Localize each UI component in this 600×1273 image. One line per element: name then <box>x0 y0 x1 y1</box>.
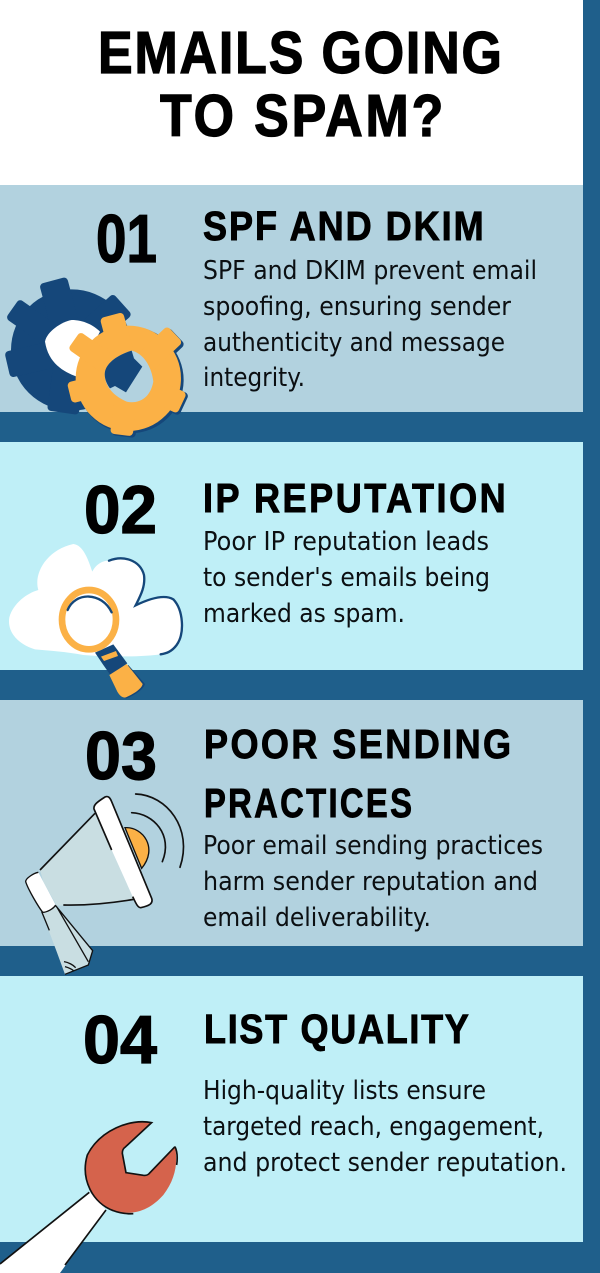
body text: list quality: and protect sender reputation. <box>203 1148 567 1178</box>
heading: list quality: LIST QUALITY <box>204 1007 469 1053</box>
body text: IP reputation: Poor IP reputation leads <box>203 527 489 557</box>
heading: SPF and DKIM: SPF AND DKIM <box>203 204 484 250</box>
body text: list quality: High-quality lists ensure <box>203 1076 486 1106</box>
body text: poor sending practices: Poor email sending practices <box>203 831 543 861</box>
panel: poor sending practices <box>0 700 583 974</box>
body text: SPF and DKIM <box>203 256 537 393</box>
icon: wrench <box>0 1122 177 1273</box>
panel: SPF and DKIM <box>0 185 583 438</box>
body text: SPF and DKIM: SPF and DKIM prevent email <box>203 256 537 286</box>
panel: IP reputation <box>0 442 583 698</box>
icon: gears <box>4 277 189 438</box>
body text: poor sending practices: email deliverability. <box>203 903 431 933</box>
heading: poor sending practices <box>204 722 511 826</box>
icon: cloud with magnifier <box>9 544 182 698</box>
body text: IP reputation: to sender's emails being <box>203 563 490 593</box>
heading: poor sending practices: PRACTICES <box>204 779 412 826</box>
body text: poor sending practices: harm sender reputation and <box>203 867 538 897</box>
number 03: 03 <box>85 718 157 794</box>
title: TO SPAM? <box>160 83 443 149</box>
number 01: 01 <box>96 201 157 277</box>
icon: megaphone <box>26 794 184 974</box>
body text: SPF and DKIM: integrity. <box>203 363 305 393</box>
heading: IP reputation: IP REPUTATION <box>203 476 506 522</box>
body text: SPF and DKIM: spoofing, ensuring sender <box>203 292 511 322</box>
title: EMAILS GOING <box>98 20 502 86</box>
body text: SPF and DKIM: authenticity and message <box>203 328 505 358</box>
number 02: 02 <box>84 472 157 548</box>
title <box>98 20 502 149</box>
body text: IP reputation: marked as spam. <box>203 599 405 629</box>
number 04: 04 <box>83 1002 157 1078</box>
heading: poor sending practices: POOR SENDING <box>204 722 511 768</box>
body text: IP reputation <box>203 527 490 629</box>
body text: list quality: targeted reach, engagement, <box>203 1112 544 1142</box>
body text: poor sending practices <box>203 831 543 933</box>
body text: list quality <box>203 1076 567 1178</box>
panel: list quality <box>0 976 583 1273</box>
